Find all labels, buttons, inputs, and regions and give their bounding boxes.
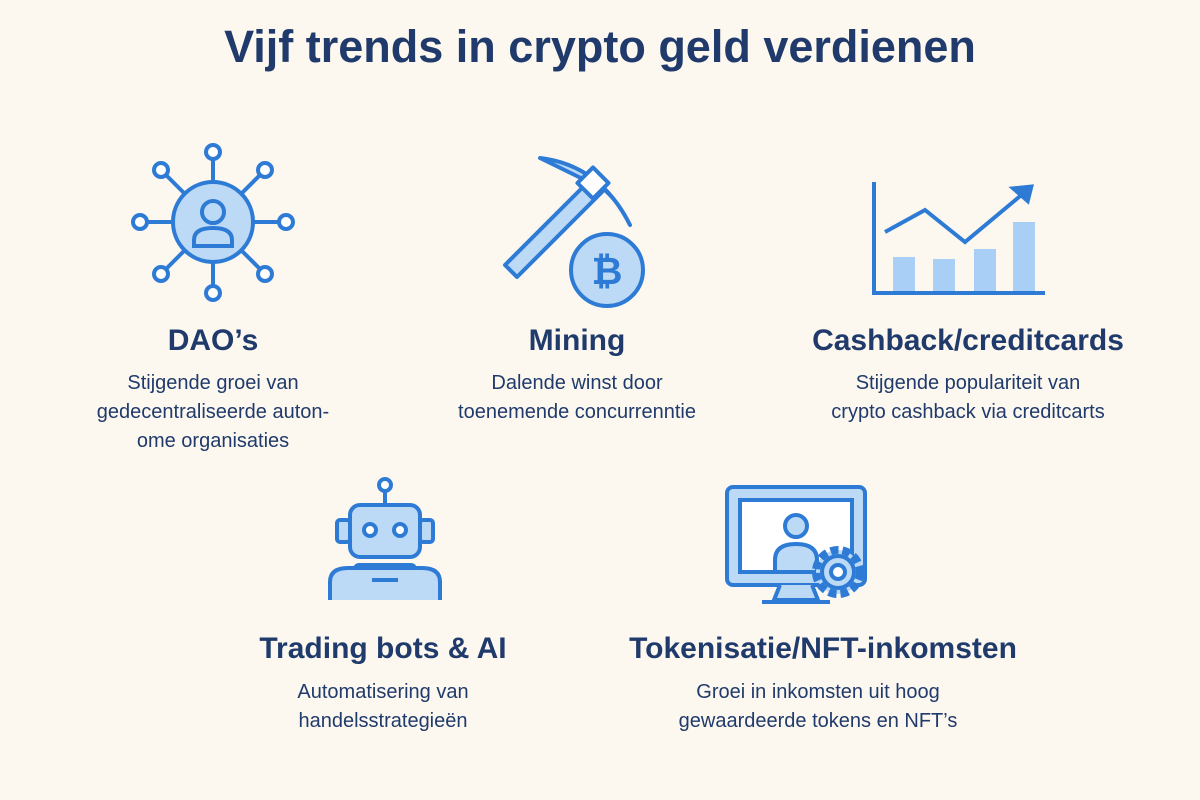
text: Trading description: Automatisering van (297, 681, 469, 703)
heading: Cashback: Cashback/creditcards (812, 324, 1124, 357)
title: Vijf trends in crypto geld verdienen (224, 21, 976, 72)
text: DAO description: Stijgende groei van (127, 372, 299, 394)
text: Cashback description: crypto cashback via creditcarts (831, 401, 1105, 423)
icon: pickaxe with bitcoin (505, 158, 643, 306)
heading: Trading bots: Trading bots & AI (259, 632, 507, 665)
text: DAO description: ome organisaties (137, 430, 289, 452)
icon: DAO network (133, 145, 293, 300)
text: Mining description: toenemende concurrenntie (458, 401, 696, 423)
heading: Tokenisatie: Tokenisatie/NFT-inkomsten (629, 632, 1017, 665)
chart: cashback (874, 182, 1045, 293)
text: Trading description: handelsstrategieën (298, 710, 468, 732)
heading: DAO: DAO’s (168, 324, 258, 357)
icon: pickaxe with bitcoin: ₿ (592, 251, 622, 293)
icon: monitor with user and gear (727, 487, 865, 602)
text: Cashback description: Stijgende populariteit van (856, 372, 1080, 394)
text: Tokenisatie description: Groei in inkomsten uit hoog (696, 681, 940, 703)
heading: Mining: Mining (529, 324, 625, 357)
icon: robot (330, 479, 440, 600)
text: Mining description: Dalende winst door (491, 372, 663, 394)
text: DAO description: gedecentraliseerde auton- (97, 401, 329, 423)
text: Tokenisatie description: gewaardeerde tokens en NFT’s (679, 710, 957, 732)
